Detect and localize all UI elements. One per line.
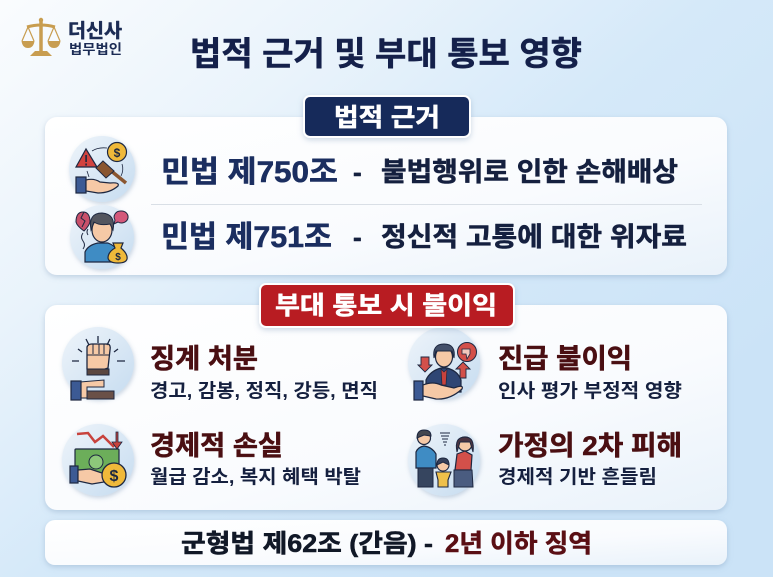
panel: legal basis [45, 117, 727, 275]
icon: clenched fist [62, 327, 134, 400]
item: disciplinary action: 징계 처분 [150, 344, 258, 374]
icon: falling money: $ [110, 468, 119, 485]
law 751 reference: 민법 제751조 [161, 221, 332, 254]
badge: disadvantages of military notification: 부대 통보 시 불이익 [275, 292, 497, 320]
icon: gavel, hand, warning and coin: $ [114, 146, 121, 160]
dash: - [353, 157, 362, 187]
icon: distressed person with money bag [70, 205, 134, 269]
item: secondary family harm [498, 431, 682, 488]
item: financial loss: 경제적 손실 [150, 431, 283, 461]
logo: 더신사 법무법인 [22, 18, 123, 57]
item: secondary family harm: 경제적 기반 흔들림 [498, 466, 657, 488]
footer law text: 군형법 제62조 (간음) - [181, 530, 433, 558]
item: financial loss [150, 431, 361, 488]
logo name: 더신사 [68, 20, 123, 42]
item: promotion disadvantage [498, 344, 682, 402]
law 750 description: 불법행위로 인한 손해배상 [381, 157, 678, 187]
badge: disadvantages of military notification [260, 284, 514, 327]
footer bar: military criminal law [45, 520, 727, 565]
law 750 reference: 민법 제750조 [161, 156, 338, 189]
footer penalty text: 2년 이하 징역 [445, 530, 592, 558]
item: secondary family harm: 가정의 2차 피해 [498, 431, 682, 461]
law 751 description: 정신적 고통에 대한 위자료 [381, 222, 687, 252]
item: disciplinary action: 경고, 감봉, 정직, 강등, 면직 [150, 380, 378, 402]
item: financial loss: 월급 감소, 복지 혜택 박탈 [150, 466, 361, 488]
icon: employee with thumbs down [408, 327, 480, 400]
icon: gavel, hand, warning and coin [69, 136, 135, 202]
item: disciplinary action [150, 344, 378, 402]
badge: legal basis [304, 96, 470, 137]
badge: legal basis: 법적 근거 [334, 104, 440, 132]
dash: - [353, 222, 362, 252]
logo subtitle: 법무법인 [69, 42, 122, 57]
item: promotion disadvantage: 진급 불이익 [498, 344, 632, 374]
icon: golden scales [22, 18, 60, 56]
icon: falling money [62, 424, 134, 496]
icon: family [408, 424, 480, 496]
icon: distressed person with money bag: $ [115, 252, 121, 263]
title: 법적 근거 및 부대 통보 영향 [190, 35, 582, 72]
item: promotion disadvantage: 인사 평가 부정적 영향 [498, 380, 682, 402]
panel: disadvantages [45, 305, 727, 510]
